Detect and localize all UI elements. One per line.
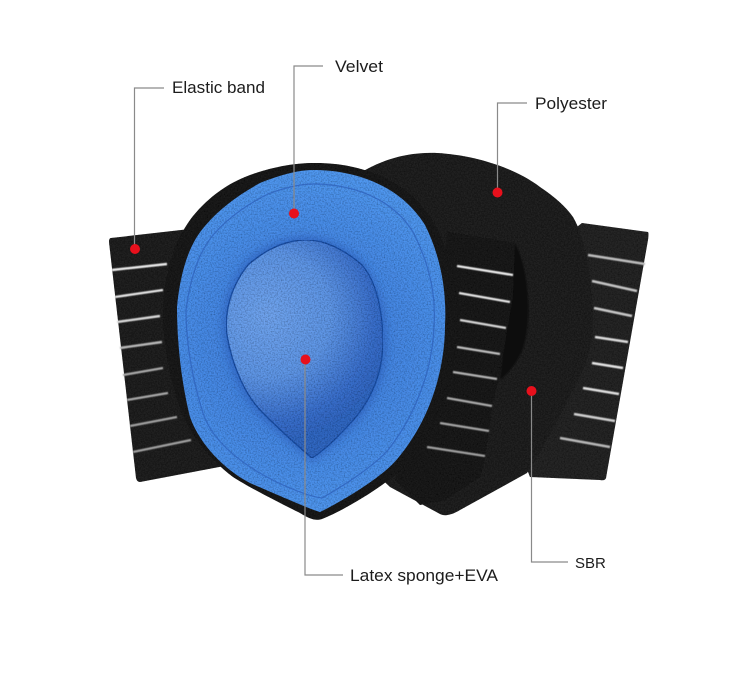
marker dot: SBR	[526, 386, 536, 396]
front pad: black rim	[163, 163, 457, 520]
marker dot: Polyester	[492, 188, 502, 198]
velvet seam	[186, 184, 434, 498]
velvet shading around cushion	[222, 236, 387, 462]
marker dot: Velvet	[289, 208, 299, 218]
leader line: Elastic band	[134, 88, 164, 249]
front pad: teardrop arch cushion	[226, 240, 383, 458]
label: Latex sponge+EVA: Latex sponge+EVA	[350, 566, 499, 585]
back pad: polyester and SBR	[340, 153, 593, 515]
leader line: Latex sponge+EVA	[305, 359, 343, 575]
leader line: Polyester	[498, 103, 527, 192]
elastic band: right end	[500, 223, 648, 480]
leader line: SBR	[532, 391, 568, 562]
label: Polyester: Polyester	[535, 94, 607, 113]
elastic band: middle section on back pad	[395, 232, 515, 505]
leader line: Velvet	[294, 66, 323, 213]
front pad: blue velvet	[177, 170, 445, 512]
label: Velvet: Velvet	[335, 57, 383, 76]
label: SBR: SBR	[575, 555, 606, 572]
label: Elastic band: Elastic band	[172, 78, 265, 97]
marker dot: Elastic band	[130, 244, 140, 254]
elastic band: left end	[109, 229, 235, 482]
marker dot: Latex sponge+EVA	[300, 354, 310, 364]
